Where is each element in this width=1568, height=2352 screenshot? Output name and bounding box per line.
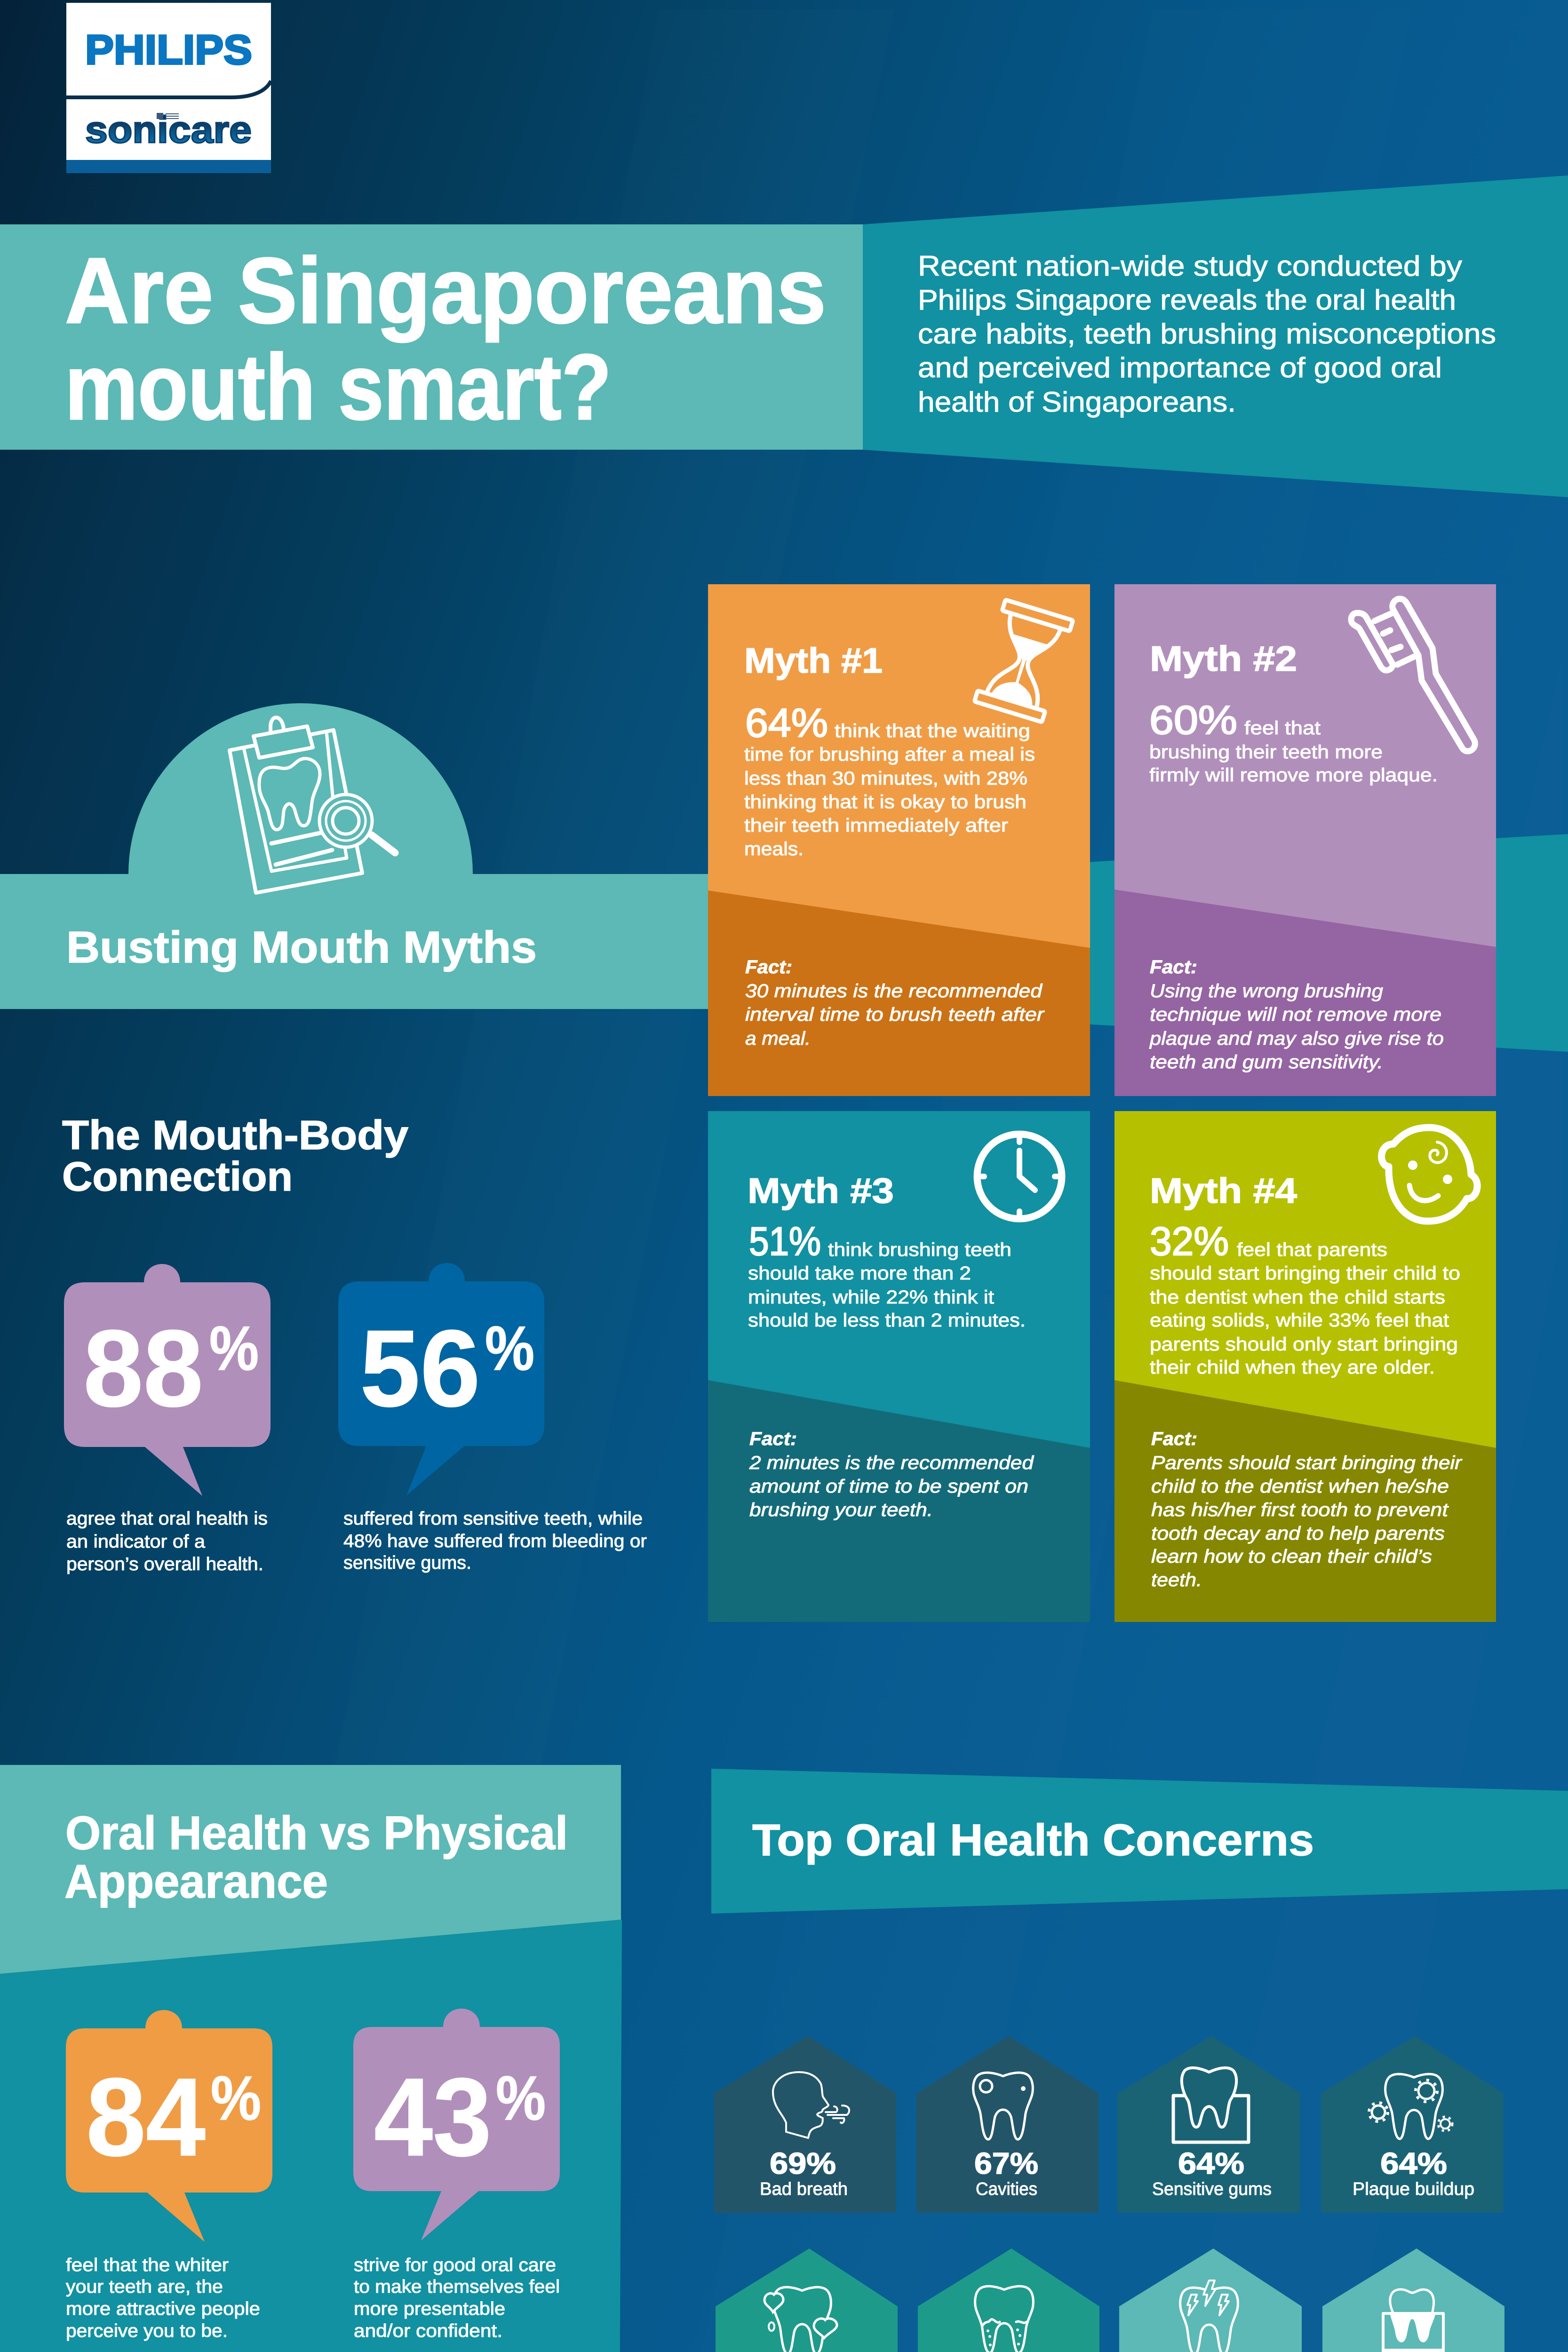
concern: sensitive gums (1118, 2036, 1300, 2213)
caption: 88%: person’s overall health. (66, 1554, 263, 1574)
callout: 88%: % (209, 1314, 259, 1383)
myth heading: Myth #2 (1150, 639, 1297, 678)
myth text: the dentist when the child starts (1150, 1287, 1445, 1308)
icon: toothbrush (1351, 599, 1475, 751)
icon: clock (977, 1134, 1062, 1219)
callout: 43%: % (496, 2064, 546, 2133)
concern: sensitive teeth (1119, 2249, 1302, 2352)
myth text (748, 1219, 1026, 1331)
panel: myth 3 (708, 1111, 1090, 1622)
myth text: their teeth immediately after (744, 815, 1008, 836)
logo blue strip (66, 160, 271, 173)
caption: 43% (354, 2255, 560, 2341)
concern: bleeding gums (1322, 2249, 1504, 2352)
caption: 84%: more attractive people (66, 2299, 260, 2319)
intro text: care habits, teeth brushing misconceptions (918, 318, 1496, 350)
fact text: teeth and gum sensitivity. (1150, 1052, 1383, 1073)
myth text: thinking that it is okay to brush (744, 792, 1027, 812)
icon: tooth with tartar (975, 2286, 1033, 2352)
caption: 84%: your teeth are, the (66, 2277, 223, 2297)
icon: head breathing (773, 2072, 849, 2138)
fact text: brushing your teeth. (749, 1500, 933, 1520)
fact text: tooth decay and to help parents (1151, 1523, 1445, 1544)
caption: 84% (66, 2255, 260, 2341)
callout: 56% (338, 1263, 544, 1495)
fact area (708, 1380, 1090, 1622)
heading: Top Oral Health Concerns (752, 1815, 1314, 1865)
fact text: plaque and may also give rise to (1149, 1028, 1444, 1049)
caption: 84%: feel that the whiter (66, 2255, 229, 2275)
fact text: Fact: (1151, 1429, 1197, 1449)
concern: stained teeth (716, 2249, 898, 2352)
fact text (1151, 1429, 1463, 1590)
intro text: health of Singaporeans. (918, 386, 1236, 418)
concern: cavities: Cavities (976, 2179, 1037, 2199)
caption: 88% (66, 1509, 268, 1574)
fact text: Using the wrong brushing (1150, 981, 1383, 1001)
fact text: interval time to brush teeth after (745, 1004, 1045, 1025)
concern: cavities: 67% (974, 2146, 1038, 2180)
section: Busting Mouth Myths (0, 703, 708, 1009)
icon: bleeding gums tooth (1382, 2289, 1445, 2352)
callout: 84%: % (211, 2064, 261, 2133)
myth heading: Myth #1 (744, 641, 883, 680)
concern: tartar buildup (918, 2249, 1099, 2352)
title text (65, 238, 826, 439)
title background (0, 224, 863, 450)
heading: Appearance (64, 1855, 328, 1908)
callout: 56%: % (485, 1314, 534, 1383)
title text: Are Singaporeans (65, 238, 826, 342)
panel: myth 4 (1114, 1111, 1496, 1622)
intro text (918, 250, 1496, 418)
intro text: Philips Singapore reveals the oral health (918, 284, 1456, 316)
fact text: Fact: (749, 1429, 797, 1449)
icon: tooth with cavities (973, 2073, 1033, 2139)
callout: 56%: 56 (360, 1308, 480, 1430)
myth text: think that the waiting (835, 721, 1030, 741)
title text: mouth smart? (65, 335, 612, 439)
caption: 56% (343, 1509, 647, 1573)
heading: Oral Health vs Physical (65, 1807, 568, 1859)
myth text (1149, 698, 1438, 786)
myth text: should start bringing their child to (1150, 1263, 1460, 1284)
sonicare wordmark: sonicare (85, 109, 252, 151)
concern: plaque buildup: 64% (1380, 2146, 1447, 2180)
icon: baby face (1382, 1128, 1477, 1221)
fact text: Fact: (1150, 957, 1197, 977)
icon: hourglass (974, 600, 1073, 722)
fact text: has his/her first tooth to prevent (1151, 1500, 1449, 1520)
fact area (708, 890, 1090, 1096)
banner (711, 1769, 1568, 1914)
callout: 88% (64, 1264, 271, 1496)
logo divider curve (66, 81, 271, 97)
fact area (1114, 890, 1496, 1096)
concern: sensitive gums: Sensitive gums (1152, 2179, 1272, 2199)
intro text: and perceived importance of good oral (918, 352, 1442, 383)
fact text: teeth. (1151, 1570, 1202, 1590)
section: Top Oral Health Concerns (711, 1769, 1568, 2352)
heading (62, 1112, 408, 1200)
fact text: 2 minutes is the recommended (749, 1453, 1035, 1473)
concern: bad breath: Bad breath (760, 2179, 848, 2199)
fact text (749, 1429, 1035, 1520)
myth text: think brushing teeth (828, 1240, 1011, 1260)
PHILIPS wordmark: PHILIPS (85, 26, 252, 73)
panel lower (0, 1920, 622, 2352)
panel: Oral Health vs Physical Appearance (0, 1765, 622, 2352)
icon: clipboard with tooth and magnifier (230, 717, 395, 893)
caption: 43%: strive for good oral care (354, 2255, 556, 2275)
band behind myth cards (708, 834, 1568, 1052)
caption: 43%: and/or confident. (354, 2321, 502, 2341)
myth text: 64% (745, 701, 828, 746)
fact text: child to the dentist when he/she (1151, 1476, 1449, 1497)
panel: myth 2 (1114, 584, 1496, 1096)
fact text: Parents should start bringing their (1151, 1453, 1463, 1473)
myth heading: Myth #4 (1150, 1171, 1297, 1210)
callout: 84% (66, 2010, 272, 2242)
myth text: should be less than 2 minutes. (748, 1310, 1026, 1331)
title band (0, 224, 863, 450)
fact text (745, 957, 1045, 1049)
caption: 56%: sensitive gums. (343, 1553, 471, 1573)
concern: bad breath: 69% (770, 2146, 836, 2180)
myth heading: Myth #3 (748, 1171, 894, 1210)
concern: sensitive gums: 64% (1178, 2146, 1244, 2180)
caption: 43%: to make themselves feel (354, 2277, 560, 2297)
myth text: feel that (1244, 718, 1321, 739)
myth text: less than 30 minutes, with 28% (744, 768, 1027, 789)
icon: tooth with plaque gears (1369, 2074, 1452, 2139)
concern: bad breath (714, 2036, 896, 2213)
callout: 43%: 43 (374, 2055, 492, 2179)
callout: 84%: 84 (86, 2055, 206, 2179)
myth text: eating solids, while 33% feel that (1150, 1310, 1449, 1331)
myth text: should take more than 2 (748, 1263, 971, 1284)
intro text: Recent nation-wide study conducted by (918, 250, 1462, 282)
myth text: minutes, while 22% think it (748, 1287, 994, 1308)
myth text: 51% (749, 1219, 821, 1264)
concern: cavities (916, 2036, 1098, 2213)
caption: 88%: an indicator of a (66, 1532, 205, 1552)
fact area (1114, 1380, 1496, 1622)
callout: 88%: 88 (83, 1308, 203, 1430)
myth text (744, 701, 1035, 859)
band and dome (0, 703, 708, 1009)
fact text: amount of time to be spent on (749, 1476, 1028, 1497)
heading (64, 1807, 568, 1908)
callout: 43% (353, 2009, 560, 2241)
section heading: Busting Mouth Myths (66, 922, 537, 972)
caption: 56%: 48% have suffered from bleeding or (343, 1531, 647, 1551)
myth text (1150, 1219, 1460, 1378)
icon: tooth in gum (1173, 2068, 1249, 2142)
myth text: 60% (1149, 698, 1237, 743)
myth text: 32% (1150, 1219, 1229, 1264)
fact text (1149, 957, 1444, 1073)
myth text: firmly will remove more plaque. (1149, 765, 1438, 786)
panel upper (0, 1765, 621, 1974)
panel: myth 1 (708, 584, 1090, 1096)
myth text: brushing their teeth more (1149, 742, 1383, 763)
concern: plaque buildup: Plaque buildup (1353, 2179, 1474, 2199)
myth text: feel that parents (1237, 1240, 1387, 1260)
fact text: Fact: (745, 957, 792, 977)
icon: stained tooth (764, 2287, 837, 2352)
icon: tooth with lightning (1180, 2280, 1238, 2352)
myth text: their child when they are older. (1150, 1357, 1435, 1378)
section: The Mouth-Body Connection (62, 1112, 647, 1574)
fact text: a meal. (745, 1028, 811, 1049)
heading: The Mouth-Body (62, 1112, 408, 1158)
fact text: 30 minutes is the recommended (745, 981, 1043, 1001)
caption: 43%: more presentable (354, 2299, 505, 2319)
myth text: time for brushing after a meal is (744, 744, 1035, 765)
myth text: parents should only start bringing (1150, 1334, 1458, 1355)
fact text: technique will not remove more (1150, 1004, 1441, 1025)
concern: plaque buildup (1321, 2036, 1503, 2213)
caption: 88%: agree that oral health is (66, 1509, 268, 1529)
myth text: meals. (744, 839, 804, 859)
heading: Connection (62, 1154, 293, 1200)
caption: 84%: perceive you to be. (66, 2321, 228, 2341)
intro panel (863, 175, 1568, 497)
sonicare dots (157, 113, 179, 119)
logo: Philips Sonicare (66, 3, 271, 173)
fact text: learn how to clean their child’s (1151, 1546, 1432, 1567)
caption: 56%: suffered from sensitive teeth, while (343, 1509, 643, 1529)
